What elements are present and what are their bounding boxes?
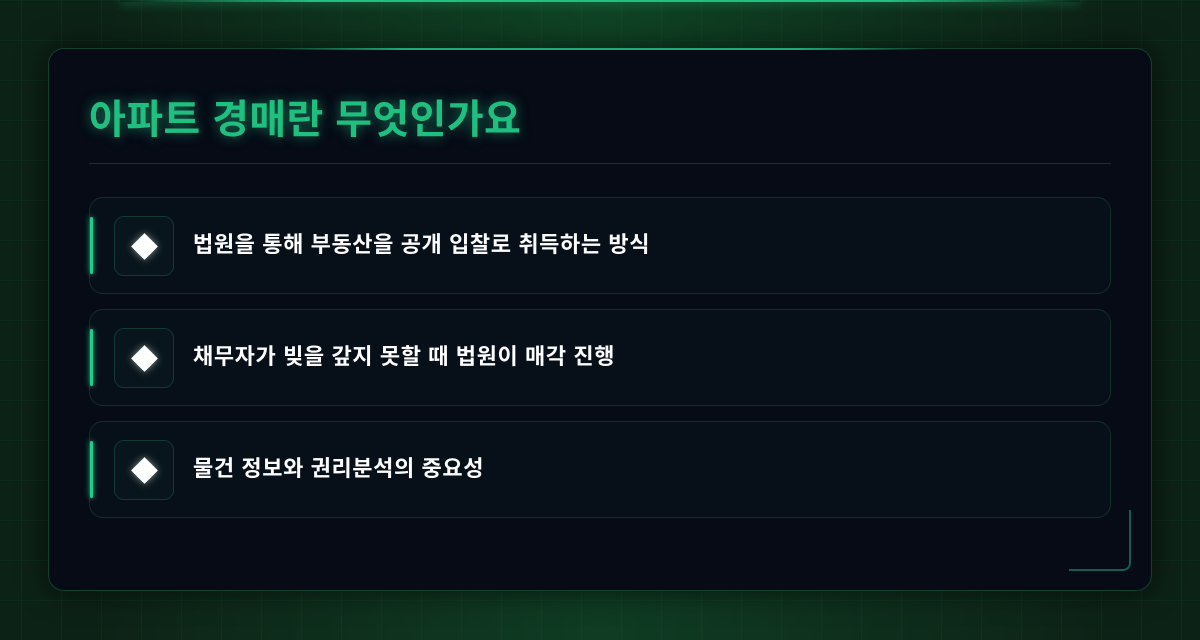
icon: diamond: [114, 328, 174, 388]
item 3: [89, 421, 1111, 518]
text 1: 법원을 통해 부동산을 공개 입찰로 취득하는 방식: [193, 232, 650, 257]
icon: diamond: [114, 216, 174, 276]
icon: diamond: [114, 440, 174, 500]
item 1: [89, 197, 1111, 294]
corner bracket: [1069, 510, 1131, 571]
text 3: 물건 정보와 권리분석의 중요성: [193, 456, 484, 481]
item 2: [89, 309, 1111, 406]
text 2: 채무자가 빚을 갚지 못할 때 법원이 매각 진행: [193, 344, 615, 369]
panel: main card: [48, 48, 1152, 591]
title: 아파트 경매란 무엇인가요: [89, 98, 521, 142]
